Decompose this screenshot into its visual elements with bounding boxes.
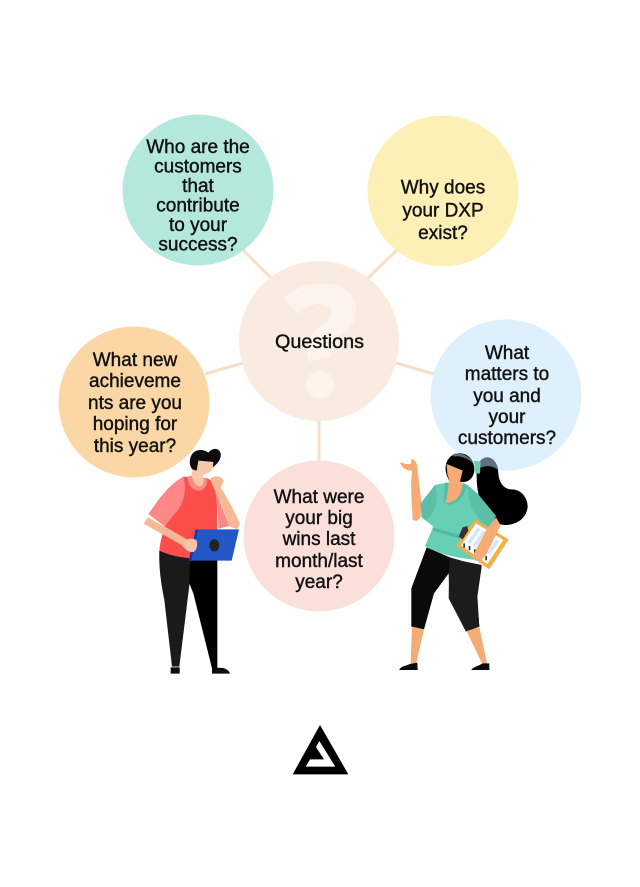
panel: what matters question — [430, 320, 582, 470]
panel: DXP question — [368, 116, 518, 266]
panel: big wins question: What were — [274, 487, 364, 508]
panel: what matters question: you and — [473, 386, 541, 407]
panel: achievements question: this year? — [94, 436, 176, 457]
panel: what matters question: customers? — [458, 428, 556, 449]
panel: big wins question: wins last — [282, 529, 356, 550]
panel: achievements question: achieveme — [89, 371, 181, 392]
panel: big wins question: your big — [285, 508, 353, 529]
panel: big wins question: year? — [295, 572, 343, 593]
panel: DXP question: exist? — [418, 223, 468, 244]
panel: DXP question: Why does — [401, 178, 485, 198]
panel: achievements question: hoping for — [93, 414, 178, 435]
panel: what matters question: matters to — [465, 364, 549, 385]
panel: what matters question: What — [485, 343, 530, 364]
heading: Questions: Questions — [275, 331, 364, 353]
panel: DXP question: your DXP — [402, 200, 484, 222]
panel: customers question: Who are the — [146, 137, 250, 158]
panel: big wins question — [244, 460, 394, 612]
panel: customers question: contribute — [156, 196, 240, 216]
panel: central Questions hub — [239, 261, 399, 421]
panel: achievements question: What new — [93, 350, 178, 371]
panel: achievements question: nts are you — [88, 393, 182, 414]
illustration: woman with clipboard — [399, 453, 528, 670]
panel: what matters question: your — [489, 407, 526, 428]
panel: customers question — [122, 114, 274, 266]
panel: big wins question: month/last — [275, 551, 364, 572]
panel: customers question: that — [182, 176, 215, 197]
icon: question mark — [283, 283, 356, 398]
panel: customers question: success? — [158, 234, 238, 256]
panel: achievements question — [58, 326, 210, 478]
panel: customers question: customers — [154, 156, 242, 178]
logo — [293, 725, 348, 774]
panel: customers question: to your — [169, 215, 228, 236]
illustration: man with tablet — [144, 449, 240, 674]
